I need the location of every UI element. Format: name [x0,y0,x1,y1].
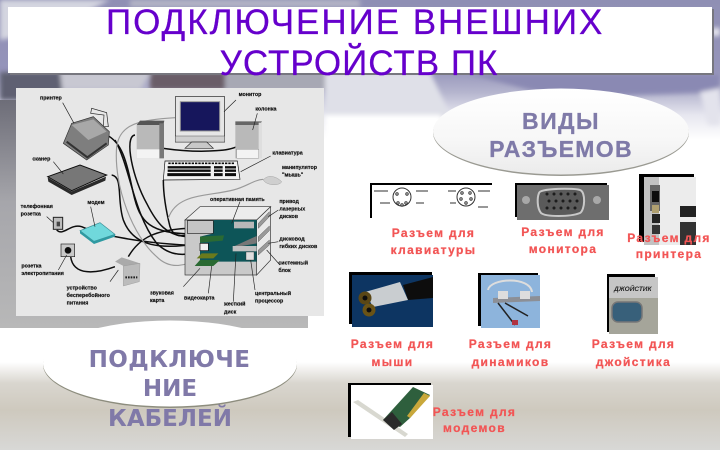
label: monitor: монитора [529,242,597,256]
label: modems: модемов [443,421,506,435]
label: keyboard: клавиатуры [391,243,476,257]
diagram labels: дисковод [279,237,305,243]
diagram labels: модем [87,200,105,206]
diagram labels: манипулятор [282,165,318,171]
label: printer: Разъем для [627,231,711,245]
mouse [263,176,282,185]
image: joystick connector [607,274,658,334]
oval: connector types heading: ВИДЫ [522,108,600,134]
monitor [175,97,225,148]
diagram labels: монитор [239,92,262,98]
label: monitor: Разъем для [521,225,605,239]
diagram labels: питания [67,300,88,306]
label: mouse: Разъем для [351,337,434,351]
diagram labels: диск [224,309,237,315]
image: joystick connector: ДЖОЙСТИК [613,284,652,293]
oval: cable connection heading: НИЕ [143,376,197,402]
diagram labels: колонка [255,107,277,113]
diagram labels: принтер [40,95,63,101]
diagram labels: блок [278,267,291,274]
diagram labels: лазерных [279,207,305,213]
diagram labels: видеокарта [184,295,215,301]
image: mouse connector [349,272,433,327]
oval: connector types heading [433,88,689,176]
left speaker [137,121,164,158]
printer [63,108,109,160]
label: keyboard: Разъем для [392,226,475,240]
label: joystick: Разъем для [592,337,675,351]
image: keyboard connector [370,183,494,221]
oval: cable connection heading [43,320,297,432]
modem [80,223,115,244]
diagram labels: розетка [21,211,41,217]
title text: ПОДКЛЮЧЕНИЕ ВНЕШНИХ [106,3,604,42]
connector labels [351,225,711,435]
label: joystick: джойстика [596,355,671,369]
diagram labels: дисков [279,214,299,220]
label: modems: Разъем для [433,405,516,419]
system unit [185,207,271,275]
diagram labels: привод [279,199,299,205]
title bar [8,3,714,83]
diagram labels: звуковая [150,291,174,297]
panel: connection diagram [0,88,324,328]
title bar: УСТРОЙСТВ ПК [220,43,498,83]
label: speakers: Разъем для [469,337,552,351]
diagram labels: электропитания [21,271,64,277]
diagram labels: розетка [21,263,42,269]
diagram labels: системный [278,260,308,267]
diagram labels: карта [150,298,164,304]
label: speakers: динамиков [472,355,549,369]
diagram labels [21,92,318,315]
image: monitor connector [515,183,609,220]
right speaker [235,121,262,158]
diagram labels: "мышь" [282,172,304,178]
label: printer: принтера [636,247,702,261]
diagram labels: оперативная память [210,197,265,203]
power socket [61,244,75,257]
oval: connector types heading: РАЗЪЕМОВ [489,136,633,162]
wall phone socket [53,217,63,229]
diagram labels: процессор [255,299,284,305]
keyboard [163,161,240,180]
UPS [115,257,140,286]
label: mouse: мыши [372,355,413,369]
diagram labels: бесперебойного [67,292,111,299]
diagram labels: сканер [32,156,51,162]
diagram labels: гибких дисков [279,243,318,250]
image: printer connector [639,174,696,245]
diagram labels: жесткий [223,301,245,308]
image: modem card [348,383,433,439]
leader lines [47,100,280,302]
diagram artwork [21,92,318,315]
scanner [48,165,107,195]
diagram labels: клавиатура [272,151,303,157]
image: speaker connector [478,273,540,328]
oval: cable connection heading: КАБЕЛЕЙ [108,404,232,432]
oval: cable connection heading: ПОДКЛЮЧЕ [89,347,250,373]
diagram labels: телефонная [21,203,53,210]
diagram labels: устройство [67,284,98,291]
diagram labels: центральный [255,290,291,297]
